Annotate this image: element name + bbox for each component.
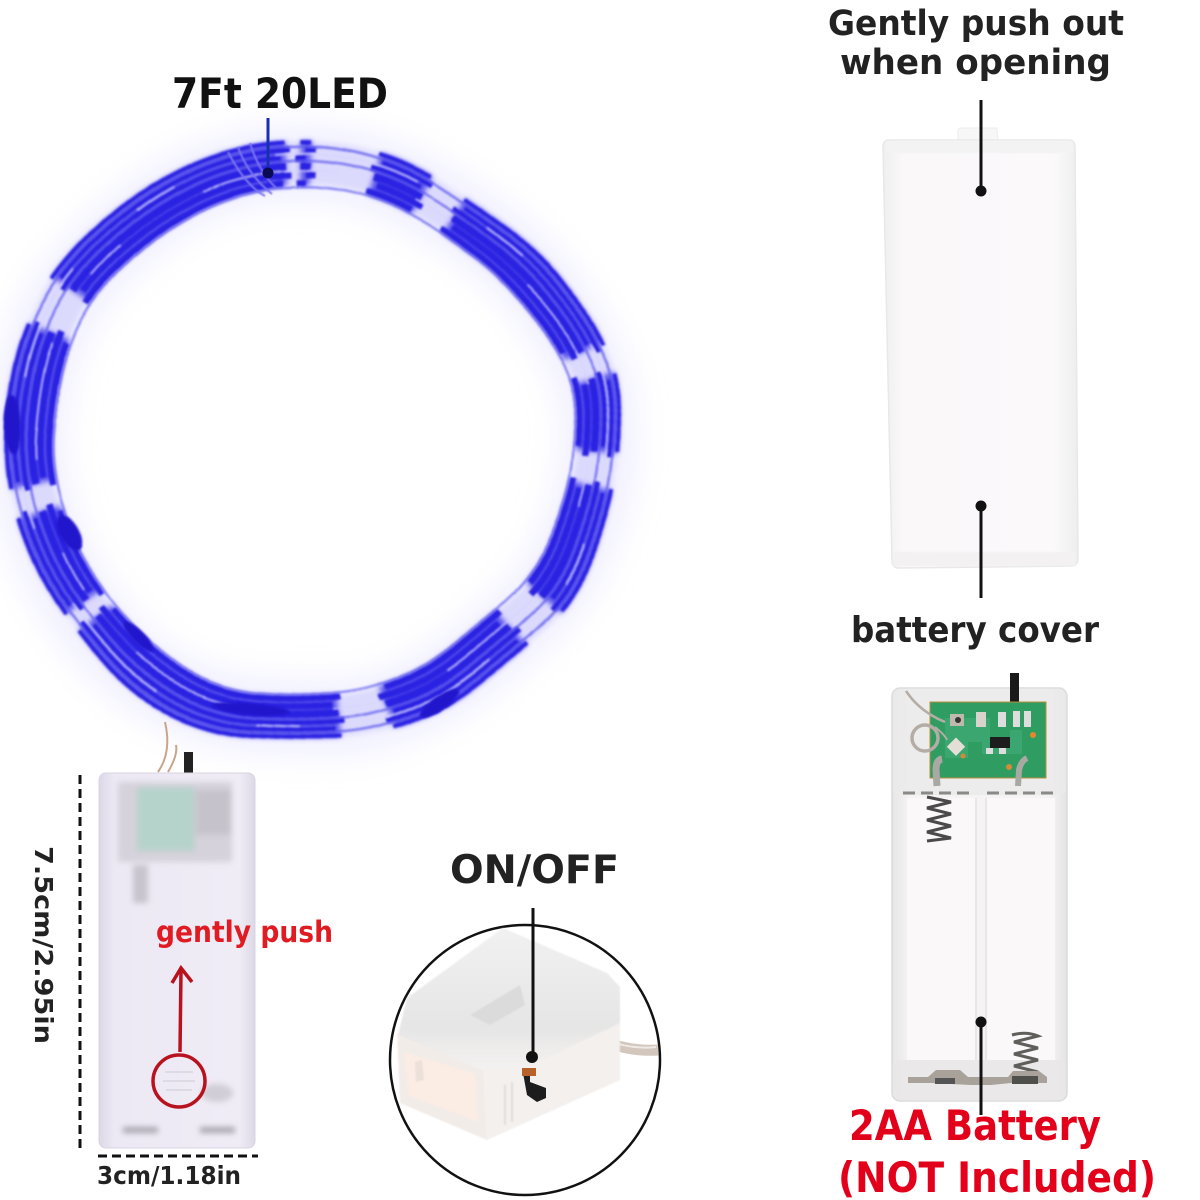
title: 7Ft 20LED: 7Ft 20LED (172, 69, 388, 118)
label: gently push: gently push (156, 915, 333, 949)
leader line: switch (526, 908, 538, 1063)
panel: closed battery box (99, 722, 255, 1148)
dimension: width: 3cm/1.18in (97, 1161, 241, 1190)
contact tabs (936, 759, 942, 786)
panel: battery cover (883, 128, 1078, 568)
label: ON/OFF: ON/OFF (450, 848, 619, 893)
blurred circuit board (118, 782, 235, 1133)
leader line: cover top (976, 100, 986, 196)
dimension: height: 7.5cm/2.95in (29, 846, 58, 1044)
switch knob (523, 1073, 546, 1102)
panel: open battery holder with circuit board (892, 673, 1067, 1101)
thin connecting strands (10, 146, 617, 735)
box body (397, 928, 620, 1140)
label: 2AA Battery (NOT Included): 2AA Battery (849, 1101, 1101, 1150)
bottom contacts (908, 1070, 1047, 1085)
wire coil (906, 691, 947, 751)
switch tab (1010, 673, 1019, 702)
title: 7Ft 20LED (172, 69, 388, 178)
heading: Gently push out when opening (828, 4, 1124, 83)
dark clusters (4, 397, 464, 722)
arrow: push direction (153, 968, 205, 1107)
LED string light ring (4, 142, 621, 739)
pale highlights between strands (17, 153, 610, 728)
leader line: cover bottom (976, 500, 986, 598)
heading: Gently push out when opening: Gently push out (828, 4, 1124, 44)
wire knot (228, 143, 276, 196)
heading: Gently push out when opening: when opening (840, 43, 1111, 83)
bottom spring (1012, 1033, 1038, 1077)
cable (600, 1040, 658, 1050)
label: 2AA Battery (NOT Included) (838, 1101, 1156, 1200)
leader line: battery (976, 1016, 986, 1115)
panel: switch close-up (390, 925, 660, 1195)
top spring (927, 797, 951, 841)
label: battery cover: battery cover (851, 610, 1099, 651)
circuit board (930, 702, 1046, 778)
